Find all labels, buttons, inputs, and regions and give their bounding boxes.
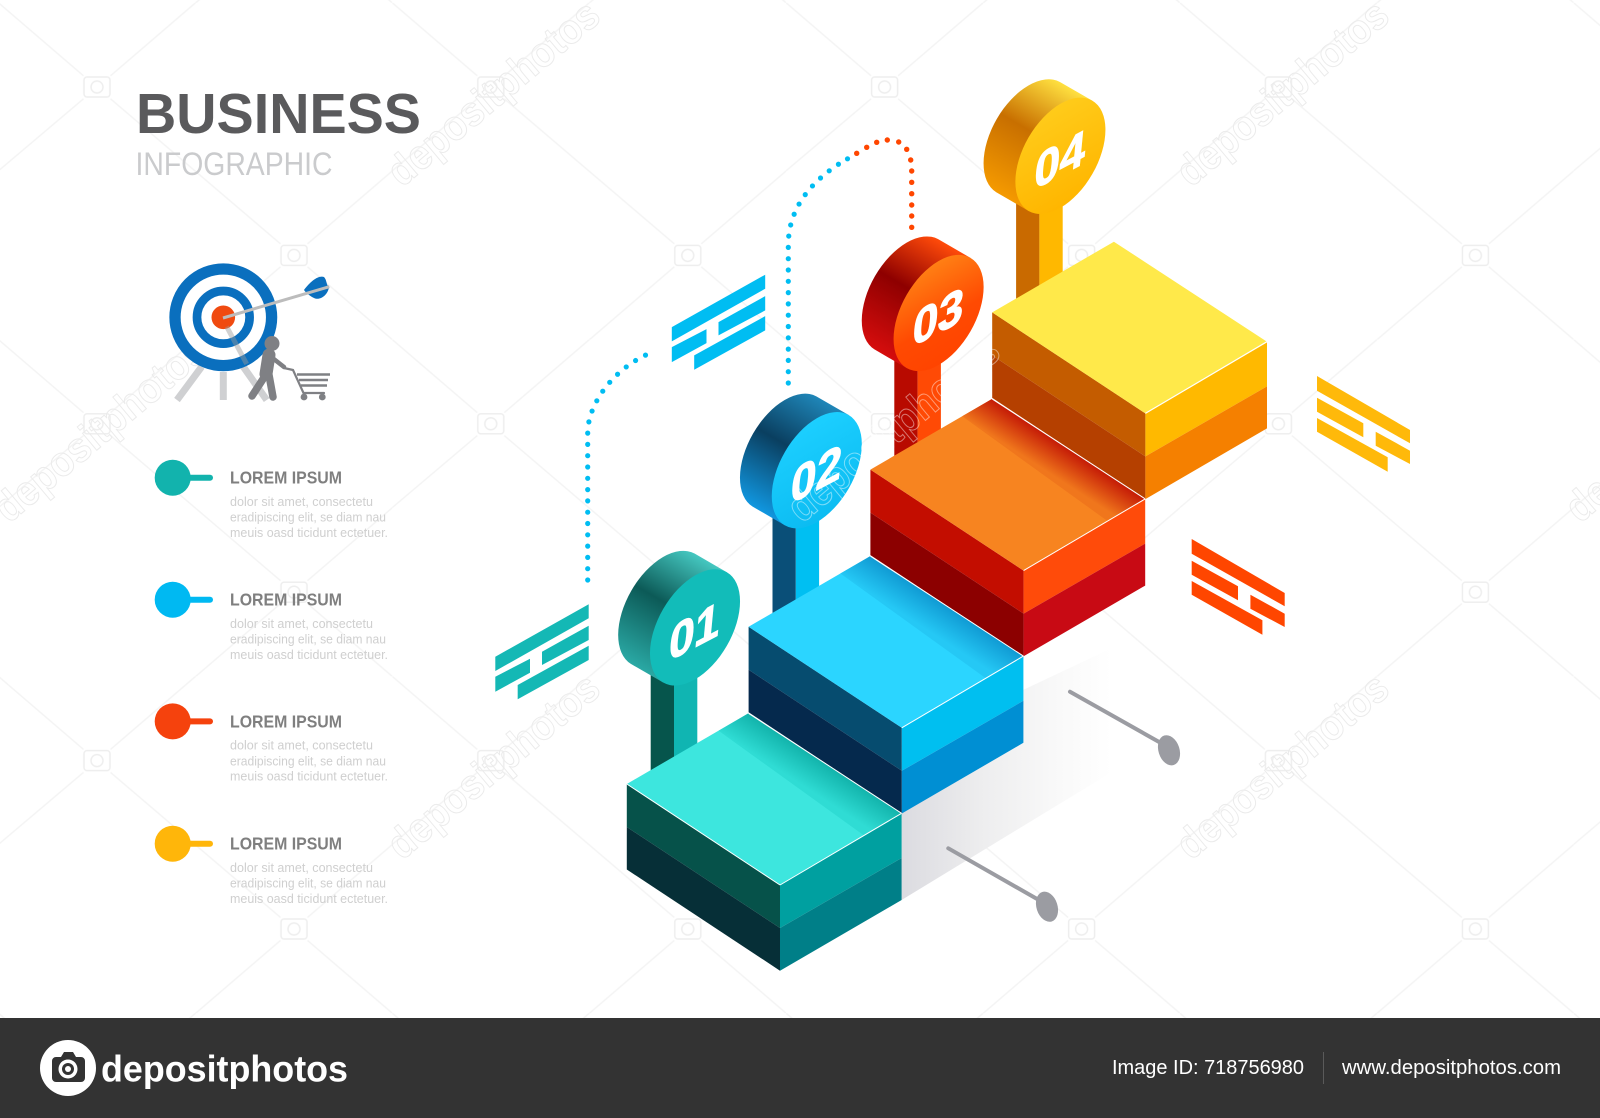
legend item 1: meuis oasd ticidunt ectetuer. (230, 525, 388, 540)
dotted connector: step 2 to step 3, red part (854, 137, 914, 230)
legend item 2: meuis oasd ticidunt ectetuer. (230, 647, 388, 662)
dotted connector: step 1 to step 2 (588, 354, 648, 580)
pin 03: 03 (910, 275, 966, 358)
title: BUSINESS (136, 82, 421, 146)
legend item 1: LOREM IPSUM (230, 468, 342, 488)
pin 04 (984, 41, 1105, 308)
watermark text: depositphotos (378, 663, 608, 868)
legend item 1: dolor sit amet, consectetu (230, 494, 373, 509)
legend item 2: dolor sit amet, consectetu (230, 616, 373, 631)
legend item 3: eradipiscing elit, se diam nau (230, 753, 386, 768)
footer logo wordmark: depositphotos (101, 1048, 348, 1090)
grey pointer pin, upper (1070, 692, 1184, 768)
icon: red text lines (1192, 539, 1285, 635)
pin 04: 04 (1032, 118, 1089, 201)
pin 01: 01 (667, 590, 723, 673)
watermark text (0, 0, 1600, 868)
icon: yellow text lines (1317, 376, 1410, 472)
legend item 4 (155, 826, 388, 906)
footer bar (0, 1018, 1600, 1118)
legend item 3: meuis oasd ticidunt ectetuer. (230, 769, 388, 784)
pin 02: 02 (789, 432, 845, 515)
pin 03 (862, 198, 984, 466)
subtitle: INFOGRAPHIC (136, 146, 332, 182)
step 03 block (870, 399, 1145, 656)
legend item 4: meuis oasd ticidunt ectetuer. (230, 891, 388, 906)
pin 01 (618, 513, 740, 780)
legend item 4: LOREM IPSUM (230, 834, 342, 854)
step 04 block (992, 242, 1267, 499)
step 01 block (627, 713, 902, 971)
pin 02 (740, 355, 862, 623)
watermark over the stair: depositphotos (778, 326, 1008, 531)
legend item 1: eradipiscing elit, se diam nau (230, 510, 386, 525)
legend item 2: LOREM IPSUM (230, 590, 342, 610)
dotted connector: step 2 to step 3, blue part (788, 156, 850, 383)
legend item 3: LOREM IPSUM (230, 711, 342, 731)
watermark text: depositphotos (1167, 663, 1397, 868)
legend item 2: eradipiscing elit, se diam nau (230, 632, 386, 647)
legend item 1 (155, 460, 388, 540)
step 02 block (749, 556, 1023, 814)
website: www.depositphotos.com (1341, 1057, 1561, 1079)
legend item 2 (155, 582, 388, 662)
legend item 4: eradipiscing elit, se diam nau (230, 876, 386, 891)
image id: Image ID: 718756980 (1112, 1057, 1304, 1079)
legend item 3: dolor sit amet, consectetu (230, 738, 373, 753)
icon: blue text lines (672, 275, 765, 370)
title (136, 82, 421, 182)
icon: teal text lines (495, 604, 589, 699)
legend item 3 (155, 703, 388, 784)
stair shadow on the ground (902, 648, 1112, 900)
legend item 4: dolor sit amet, consectetu (230, 860, 373, 875)
grey pointer pin, lower (948, 848, 1062, 925)
footer logo icon (40, 1040, 96, 1096)
icon: target with dart and person pushing cart (175, 269, 330, 400)
